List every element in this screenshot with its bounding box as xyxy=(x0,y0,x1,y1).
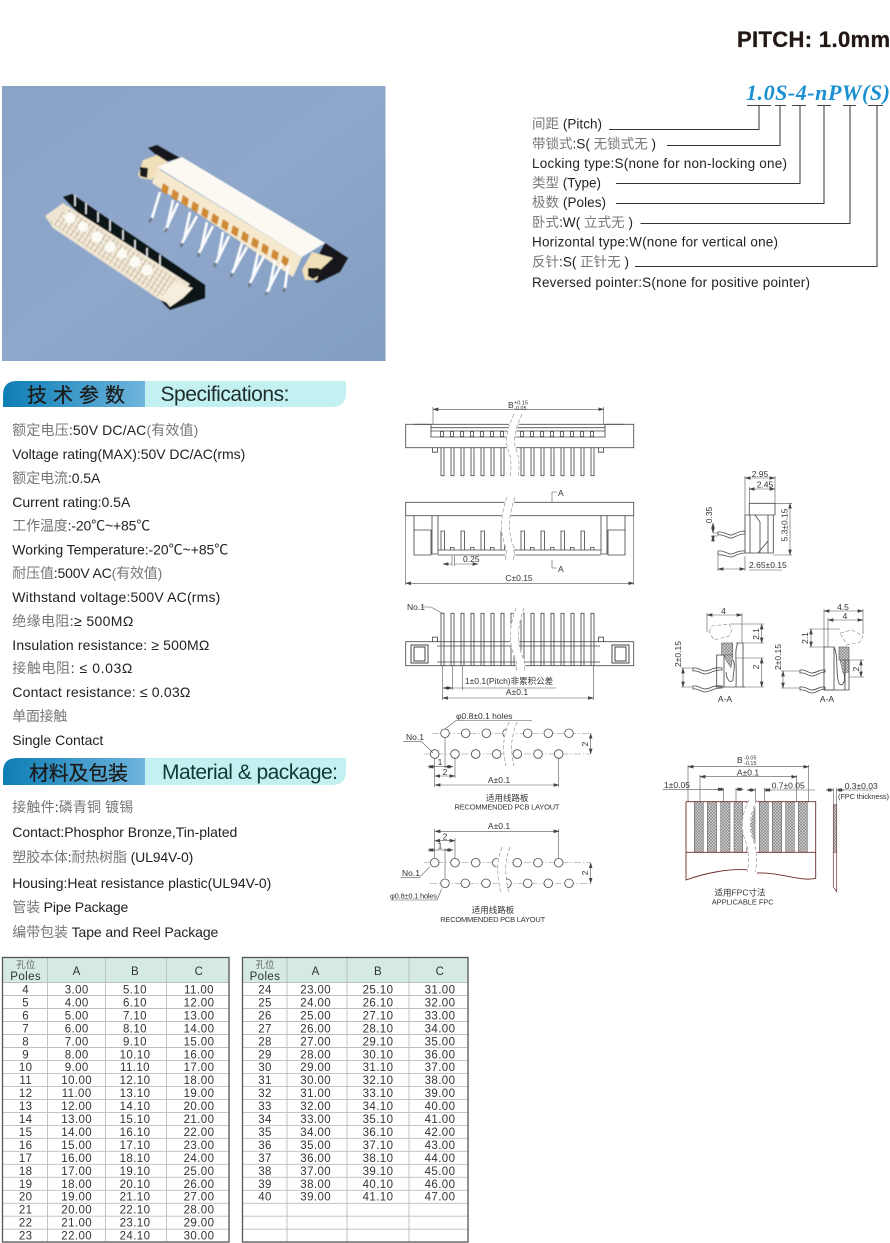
table: poles 4 to 23: 19 xyxy=(19,1179,32,1191)
table: poles 4 to 23: 9.00 xyxy=(65,1062,89,1074)
leader lines from code to labels xyxy=(609,106,877,266)
material and package text block: Contact:Phosphor Bronze,Tin-plated xyxy=(12,824,237,840)
table: poles 4 to 23: 16.10 xyxy=(120,1127,150,1139)
heading: material and package: 材料及包装 xyxy=(29,762,128,785)
table: poles 24 to 40: 40 xyxy=(258,1192,272,1204)
table: poles 4 to 23: 22 xyxy=(19,1218,32,1230)
table: poles 4 to 23: 27.00 xyxy=(184,1192,214,1204)
drawing: section A-A right: 4.5 xyxy=(837,602,849,612)
table: poles 24 to 40: 39.00 xyxy=(300,1192,331,1204)
table: poles 4 to 23: 6 xyxy=(22,1010,29,1022)
table: poles 24 to 40: 32.00 xyxy=(425,998,455,1010)
table: poles 24 to 40: 36.00 xyxy=(300,1153,331,1165)
table: poles 24 to 40: C xyxy=(436,966,444,978)
table: poles 24 to 40: 35.10 xyxy=(363,1114,393,1126)
drawing: applicable FPC: A±0.1 xyxy=(737,768,759,778)
table: poles 24 to 40: 37.00 xyxy=(425,1062,455,1074)
specifications text block: 绝缘电阻:≥ 500MΩ xyxy=(12,613,133,629)
table: poles 24 to 40: 25 xyxy=(258,998,272,1010)
heading: specifications: Specifications: xyxy=(160,383,290,406)
part number code: 1.0S-4-nPW(S) xyxy=(746,80,890,105)
table: poles 24 to 40: 42.00 xyxy=(425,1127,455,1139)
specifications text block: 额定电压:50V DC/AC(有效值) xyxy=(12,422,198,438)
table: poles 24 to 40: 38.00 xyxy=(425,1075,455,1087)
table: poles 4 to 23: 15.00 xyxy=(61,1140,92,1152)
table: poles 24 to 40: 31 xyxy=(258,1075,272,1087)
drawing: recommended PCB layout, upper: 2 xyxy=(580,741,590,746)
table: poles 4 to 23: 23 xyxy=(19,1231,32,1243)
table: poles 24 to 40: 39.00 xyxy=(425,1088,455,1100)
table: poles 24 to 40: 44.00 xyxy=(425,1153,455,1165)
table: poles 24 to 40: 30.00 xyxy=(300,1075,331,1087)
table: poles 4 to 23: 16 xyxy=(19,1140,32,1152)
table: poles 4 to 23: 12 xyxy=(19,1088,32,1100)
table: poles 24 to 40: 33.10 xyxy=(363,1088,393,1100)
table: poles 24 to 40: 31.00 xyxy=(300,1088,331,1100)
table: poles 4 to 23: 23.10 xyxy=(120,1218,150,1230)
table: poles 24 to 40: 29 xyxy=(258,1049,272,1061)
drawing: section A-A right: 2±0.15 xyxy=(773,644,783,670)
table: poles 4 to 23: 12.00 xyxy=(61,1101,92,1113)
drawing: side view with C dimension: A xyxy=(558,488,564,498)
table: poles 4 to 23: 8 xyxy=(22,1036,29,1048)
specifications text block: Single Contact xyxy=(12,732,103,748)
drawing: recommended PCB layout, upper xyxy=(403,711,591,812)
table: poles 4 to 23: 19.00 xyxy=(184,1088,214,1100)
table: poles 4 to 23: 7.10 xyxy=(123,1010,147,1022)
table: poles 4 to 23: 14.10 xyxy=(120,1101,150,1113)
specifications text block: 接触电阻: ≤ 0.03Ω xyxy=(12,660,132,676)
specifications text block: Current rating:0.5A xyxy=(12,494,131,510)
table: poles 24 to 40: 24.00 xyxy=(300,998,331,1010)
table: poles 24 to 40: 37.10 xyxy=(363,1140,393,1152)
table: poles 24 to 40: 36.00 xyxy=(425,1049,455,1061)
table: poles 24 to 40: 35.00 xyxy=(425,1036,455,1048)
table: poles 4 to 23: 8.10 xyxy=(123,1023,147,1035)
table: poles 4 to 23: 20.00 xyxy=(61,1205,92,1217)
table: poles 24 to 40: 35.00 xyxy=(300,1140,331,1152)
drawing: bottom view with A dimension: No.1 xyxy=(407,602,425,612)
heading: material and package xyxy=(3,758,346,785)
drawing: recommended PCB layout, lower: φ0.8±0.1 holes xyxy=(390,892,437,900)
table: poles 4 to 23: 24.00 xyxy=(184,1153,214,1165)
drawing: applicable FPC: -0.05 xyxy=(744,756,757,762)
table: poles 4 to 23: 21.00 xyxy=(61,1218,92,1230)
specifications text block: Working Temperature:-20℃~+85℃ xyxy=(12,542,228,558)
table: poles 4 to 23: 11.10 xyxy=(120,1062,150,1074)
table: poles 24 to 40: 47.00 xyxy=(425,1192,455,1204)
part number legend text: 类型 (Type) xyxy=(532,176,601,190)
drawing: recommended PCB layout, upper: A±0.1 xyxy=(488,775,510,785)
table: poles 4 to 23: 21.00 xyxy=(184,1114,214,1126)
specifications text block: Insulation resistance: ≥ 500MΩ xyxy=(12,637,209,653)
drawing: recommended PCB layout, upper: 1 xyxy=(438,757,443,767)
table: poles 4 to 23: 19.10 xyxy=(120,1166,150,1178)
table: poles 4 to 23: 29.00 xyxy=(184,1218,214,1230)
table: poles 24 to 40: 33 xyxy=(258,1101,272,1113)
table: poles 4 to 23: 5 xyxy=(22,998,29,1010)
table: poles 4 to 23: 23.00 xyxy=(184,1140,214,1152)
table: poles 4 to 23: 4.00 xyxy=(65,998,89,1010)
table: poles 4 to 23: 22.00 xyxy=(184,1127,214,1139)
table: poles 24 to 40: 34.00 xyxy=(425,1023,455,1035)
part number legend text: 反针:S( 正针无 ) xyxy=(532,254,629,270)
table: poles 24 to 40: 37 xyxy=(258,1153,272,1165)
drawing: recommended PCB layout, upper: 2 xyxy=(443,767,448,777)
drawing: bottom view with A dimension: A±0.1 xyxy=(506,687,528,697)
drawing: applicable FPC: 1±0.05 xyxy=(664,780,690,790)
drawing: recommended PCB layout, upper: RECOMMENDED PCB LAYOUT xyxy=(454,802,560,812)
table: poles 4 to 23: 20.10 xyxy=(120,1179,150,1191)
table: poles 24 to 40: 38.00 xyxy=(300,1179,331,1191)
part number legend text xyxy=(532,116,810,290)
table: poles 4 to 23: 5.10 xyxy=(123,984,147,996)
drawing: side view with C dimension xyxy=(406,488,634,585)
table: poles 24 to 40: 孔位 xyxy=(255,959,275,971)
table: poles 4 to 23: 11 xyxy=(19,1075,32,1087)
table: poles 4 to 23: 10.10 xyxy=(120,1049,150,1061)
table: poles 24 to 40: 28.10 xyxy=(363,1023,393,1035)
material and package text block: Housing:Heat resistance plastic(UL94V-0) xyxy=(12,875,271,891)
drawing: recommended PCB layout, lower: 适用线路板 xyxy=(472,905,515,915)
table: poles 24 to 40: 25.00 xyxy=(300,1010,331,1022)
table: poles 24 to 40: 35 xyxy=(258,1127,272,1139)
table: poles 4 to 23: 22.10 xyxy=(120,1205,150,1217)
drawing: section A-A right: 2.1 xyxy=(800,632,810,644)
table: poles 4 to 23: A xyxy=(73,966,81,978)
table: poles 24 to 40: 32.10 xyxy=(363,1075,393,1087)
drawing: section A-A left: 4 xyxy=(721,606,726,616)
table: poles 24 to 40: 34.00 xyxy=(300,1127,331,1139)
drawing: section A-A left: 2.1 xyxy=(751,628,761,640)
drawing: bottom view with A dimension xyxy=(406,602,634,700)
part number legend text: 带锁式:S( 无锁式无 ) xyxy=(532,136,656,152)
table: poles 4 to 23 xyxy=(2,958,229,1243)
table: poles 4 to 23: 8.00 xyxy=(65,1049,89,1061)
heading: material and package: Material & package: xyxy=(162,761,338,784)
drawing: side section with overall dimensions: 2.45 xyxy=(757,480,774,490)
table: poles 24 to 40: 41.10 xyxy=(363,1192,393,1204)
table: poles 24 to 40: 32 xyxy=(258,1088,272,1100)
table: poles 24 to 40: 31.10 xyxy=(363,1062,393,1074)
table: poles 4 to 23: 11.00 xyxy=(62,1088,92,1100)
table: poles 4 to 23: 30.00 xyxy=(184,1231,214,1243)
table: poles 4 to 23: 15.00 xyxy=(184,1036,214,1048)
drawing: applicable FPC xyxy=(663,755,890,906)
photo: two FPC connectors on blue background xyxy=(2,86,386,361)
part number legend text: 卧式:W( 立式无 ) xyxy=(532,215,633,230)
drawing: recommended PCB layout, upper: φ0.8±0.1 holes xyxy=(456,711,512,721)
drawing: applicable FPC: APPLICABLE FPC xyxy=(712,898,774,906)
drawing: side view with C dimension: C±0.15 xyxy=(505,573,533,583)
specifications text block: 额定电流:0.5A xyxy=(12,470,101,486)
table: poles 24 to 40: 36 xyxy=(258,1140,272,1152)
drawing: side view with C dimension: A xyxy=(558,564,564,574)
table: poles 4 to 23: 10 xyxy=(19,1062,32,1074)
drawing: section A-A left: A-A xyxy=(718,694,732,704)
table: poles 24 to 40: 39.10 xyxy=(363,1166,393,1178)
table: poles 4 to 23: 26.00 xyxy=(184,1179,214,1191)
drawing: applicable FPC: 适用FPC寸法 xyxy=(714,888,766,898)
table: poles 4 to 23: 6.10 xyxy=(123,998,147,1010)
drawing: recommended PCB layout, upper: 适用线路板 xyxy=(486,793,529,803)
connector: lower left, contact side xyxy=(45,194,205,310)
drawing: top view with B dimension: B xyxy=(508,400,514,410)
table: poles 4 to 23: 9 xyxy=(22,1049,29,1061)
table: poles 24 to 40: 33.00 xyxy=(425,1010,455,1022)
table: poles 4 to 23: 11.00 xyxy=(184,984,214,996)
table: poles 4 to 23: 22.00 xyxy=(61,1231,92,1243)
table: poles 4 to 23: 17.00 xyxy=(61,1166,92,1178)
table: poles 24 to 40: 24 xyxy=(258,984,272,996)
table: poles 4 to 23: 17.10 xyxy=(120,1140,150,1152)
drawing: recommended PCB layout, upper: No.1 xyxy=(406,732,424,742)
table: poles 24 to 40: 26 xyxy=(258,1010,272,1022)
table: poles 24 to 40: 29.10 xyxy=(363,1036,393,1048)
table: poles 4 to 23: 21.10 xyxy=(120,1192,150,1204)
drawing: section A-A left xyxy=(673,606,764,704)
table: poles 4 to 23: 14 xyxy=(19,1114,33,1126)
table: poles 4 to 23: 12.00 xyxy=(184,998,214,1010)
table: poles 24 to 40: 31.00 xyxy=(425,984,455,996)
part number legend text: 极数 (Poles) xyxy=(532,195,606,210)
table: poles 4 to 23: 9.10 xyxy=(123,1036,147,1048)
table: poles 4 to 23: 13.00 xyxy=(61,1114,92,1126)
drawing: applicable FPC: 0.7±0.05 xyxy=(772,780,805,790)
table: poles 4 to 23: 20 xyxy=(19,1192,32,1204)
drawing: recommended PCB layout, lower: A±0.1 xyxy=(488,821,510,831)
table: poles 4 to 23: 13.00 xyxy=(184,1010,214,1022)
drawing: recommended PCB layout, lower: No.1 xyxy=(402,868,420,878)
table: poles 4 to 23: B xyxy=(131,966,139,978)
table: poles 4 to 23: 18 xyxy=(19,1166,32,1178)
table: poles 24 to 40: 27.10 xyxy=(363,1010,393,1022)
table: poles 4 to 23: 25.00 xyxy=(184,1166,214,1178)
table: poles 4 to 23: 7 xyxy=(22,1023,29,1035)
table: poles 24 to 40: Poles xyxy=(250,971,280,983)
table: poles 4 to 23: 20.00 xyxy=(184,1101,214,1113)
drawing: section A-A right: A-A xyxy=(820,694,834,704)
table: poles 24 to 40 xyxy=(242,958,468,1242)
table: poles 4 to 23: 孔位 xyxy=(16,959,36,971)
table: poles 24 to 40: 41.00 xyxy=(425,1114,455,1126)
drawing: section A-A left: 2±0.15 xyxy=(673,641,683,667)
table: poles 24 to 40: 26.00 xyxy=(300,1023,331,1035)
table: poles 24 to 40: 36.10 xyxy=(363,1127,393,1139)
specifications text block xyxy=(12,422,245,748)
table: poles 24 to 40: 43.00 xyxy=(425,1140,455,1152)
drawing: side section with overall dimensions: 0.35 xyxy=(704,506,714,523)
drawing: bottom view with A dimension: 1±0.1(Pitch)非累积公差 xyxy=(465,676,553,686)
drawing: side section with overall dimensions xyxy=(704,469,792,571)
drawing: side section with overall dimensions: 2.95 xyxy=(752,469,769,479)
drawing: applicable FPC: (FPC thickness) xyxy=(838,792,890,801)
table: poles 4 to 23: 17 xyxy=(19,1153,32,1165)
table: poles 24 to 40: 34.10 xyxy=(363,1101,393,1113)
material and package text block: 接触件:磷青铜 镀锡 xyxy=(12,799,133,815)
table: poles 24 to 40: 38.10 xyxy=(363,1153,393,1165)
table: poles 24 to 40: 23.00 xyxy=(300,984,331,996)
drawing: section A-A left: 2 xyxy=(751,664,761,669)
table: poles 24 to 40: 33.00 xyxy=(300,1114,331,1126)
material and package text block: 塑胶本体:耐热树脂 (UL94V-0) xyxy=(12,849,193,865)
table: poles 24 to 40: A xyxy=(312,966,320,978)
table: poles 24 to 40: 26.10 xyxy=(363,998,393,1010)
drawing: side section with overall dimensions: 2.65±0.15 xyxy=(749,560,787,570)
drawing: recommended PCB layout, lower: 2 xyxy=(580,870,590,875)
table: poles 24 to 40: 30.10 xyxy=(363,1049,393,1061)
table: poles 4 to 23: 16.00 xyxy=(184,1049,214,1061)
drawing: top view with B dimension: +0.15 xyxy=(514,400,528,406)
table: poles 4 to 23: 12.10 xyxy=(120,1075,150,1087)
drawing: top view with B dimension: -0.05 xyxy=(514,406,527,412)
table: poles 24 to 40: 29.00 xyxy=(300,1062,331,1074)
drawing: recommended PCB layout, lower: 2 xyxy=(443,832,448,842)
table: poles 4 to 23: 18.00 xyxy=(61,1179,92,1191)
drawing: section A-A right: 4 xyxy=(843,611,848,621)
drawing: recommended PCB layout, lower: RECOMMENDED PCB LAYOUT xyxy=(440,915,546,924)
table: poles 4 to 23: 4 xyxy=(22,984,29,996)
table: poles 4 to 23: 13 xyxy=(19,1101,32,1113)
part number legend text: Reversed pointer:S(none for positive pointer) xyxy=(532,275,810,290)
drawing: side section with overall dimensions: 5.3±0.15 xyxy=(780,508,790,542)
heading: specifications xyxy=(3,381,346,407)
table: poles 24 to 40: 38 xyxy=(258,1166,272,1178)
table: poles 24 to 40: 34 xyxy=(258,1114,272,1126)
table: poles 4 to 23: 28.00 xyxy=(184,1205,214,1217)
table: poles 4 to 23: 21 xyxy=(19,1205,32,1217)
table: poles 24 to 40: 39 xyxy=(258,1179,272,1191)
material and package text block: 编带包装 Tape and Reel Package xyxy=(12,924,219,940)
drawing: side view with C dimension: 0.25 xyxy=(463,554,480,564)
material and package text block xyxy=(12,799,271,940)
table: poles 4 to 23: 15.10 xyxy=(120,1114,150,1126)
table: poles 4 to 23: C xyxy=(195,966,203,978)
part number legend text: 间距 (Pitch) xyxy=(532,116,602,132)
table: poles 4 to 23: 15 xyxy=(19,1127,32,1139)
table: poles 4 to 23: Poles xyxy=(10,971,41,983)
table: poles 4 to 23: 7.00 xyxy=(65,1036,89,1048)
table: poles 4 to 23: 16.00 xyxy=(61,1153,92,1165)
specifications text block: Withstand voltage:500V AC(rms) xyxy=(12,589,220,605)
table: poles 4 to 23: 18.00 xyxy=(184,1075,214,1087)
table: poles 4 to 23: 19.00 xyxy=(61,1192,92,1204)
connector: upper right, pins side xyxy=(138,145,348,295)
table: poles 24 to 40: 27.00 xyxy=(300,1036,331,1048)
table: poles 4 to 23: 18.10 xyxy=(120,1153,150,1165)
table: poles 4 to 23: 13.10 xyxy=(120,1088,150,1100)
specifications text block: 工作温度:-20℃~+85℃ xyxy=(12,518,150,534)
drawing: section A-A right xyxy=(773,602,864,704)
table: poles 4 to 23: 6.00 xyxy=(65,1023,89,1035)
table: poles 24 to 40: 25.10 xyxy=(363,984,393,996)
table: poles 24 to 40: 40.10 xyxy=(363,1179,393,1191)
table: poles 24 to 40: B xyxy=(374,966,382,978)
drawing: section A-A right: 2 xyxy=(851,666,861,671)
drawing: recommended PCB layout, lower xyxy=(390,821,591,924)
table: poles 24 to 40: 37.00 xyxy=(300,1166,331,1178)
table: poles 24 to 40: 45.00 xyxy=(425,1166,455,1178)
table: poles 24 to 40: 40.00 xyxy=(425,1101,455,1113)
table: poles 4 to 23: 14.00 xyxy=(184,1023,214,1035)
specifications text block: Voltage rating(MAX):50V DC/AC(rms) xyxy=(12,446,245,462)
table: poles 24 to 40: 28 xyxy=(258,1036,272,1048)
drawing: applicable FPC: -0.15 xyxy=(744,761,757,767)
table: poles 4 to 23: 24.10 xyxy=(120,1231,150,1243)
heading: specifications: 技术参数 xyxy=(27,384,125,407)
drawing: top view with B dimension xyxy=(406,400,634,478)
table: poles 4 to 23: 17.00 xyxy=(184,1062,214,1074)
table: poles 24 to 40: 28.00 xyxy=(300,1049,331,1061)
table: poles 24 to 40: 46.00 xyxy=(425,1179,455,1191)
part number legend text: Horizontal type:W(none for vertical one) xyxy=(532,234,778,250)
table: poles 4 to 23: 10.00 xyxy=(61,1075,92,1087)
drawing: applicable FPC: B xyxy=(737,755,743,765)
material and package text block: 管装 Pipe Package xyxy=(12,899,129,915)
table: poles 24 to 40: 32.00 xyxy=(300,1101,331,1113)
table: poles 24 to 40: 30 xyxy=(258,1062,272,1074)
specifications text block: 耐压值:500V AC(有效值) xyxy=(12,565,162,581)
specifications text block: Contact resistance: ≤ 0.03Ω xyxy=(12,684,190,700)
table: poles 4 to 23: 14.00 xyxy=(61,1127,92,1139)
table: poles 4 to 23: 3.00 xyxy=(65,984,89,996)
drawing: applicable FPC: 0.3±0.03 xyxy=(845,781,878,791)
part number legend text: Locking type:S(none for non-locking one) xyxy=(532,156,787,171)
table: poles 4 to 23: 5.00 xyxy=(65,1010,89,1022)
table: poles 24 to 40: 27 xyxy=(258,1023,272,1035)
specifications text block: 单面接触 xyxy=(12,708,67,724)
title: pitch: PITCH: 1.0mm xyxy=(737,27,890,52)
drawing: recommended PCB layout, lower: 1 xyxy=(438,840,443,850)
